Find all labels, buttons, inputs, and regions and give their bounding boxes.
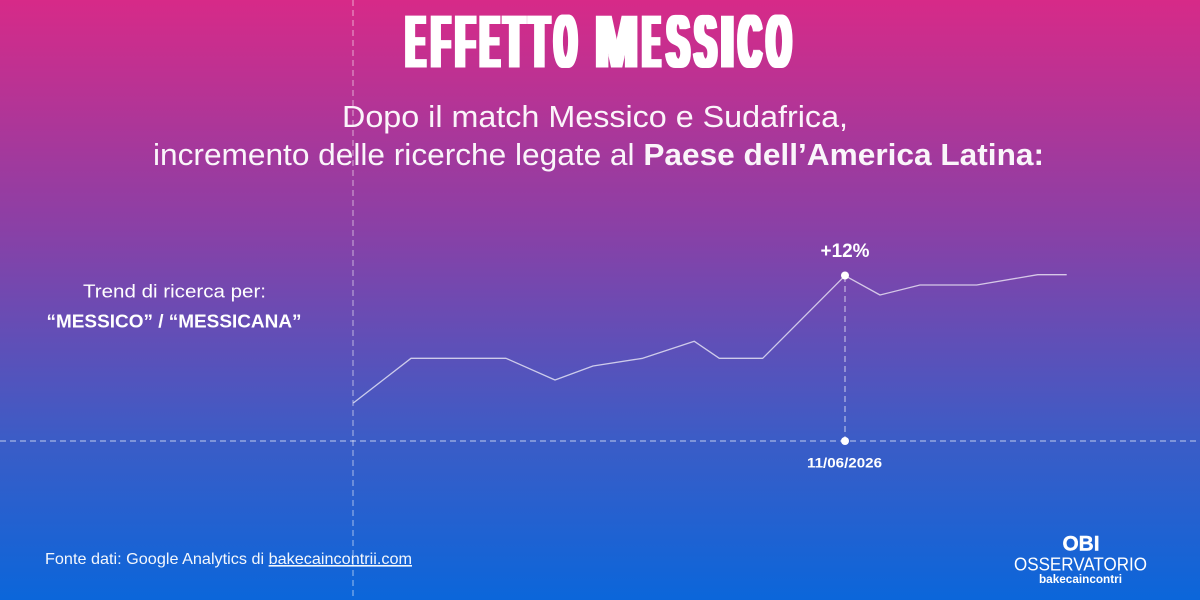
title: S: [695, 0, 716, 84]
title: I: [721, 0, 734, 84]
axis: vertical dashed line: [352, 0, 354, 600]
title: S: [667, 0, 689, 84]
chart label: Trend di ricerca per:: [83, 280, 266, 302]
logo: OBI Osservatorio bakecaincontri: [1014, 532, 1147, 586]
title: O: [555, 0, 576, 84]
subtitle: incremento delle ricerche legate al Paese dell’America Latina:: [153, 137, 1044, 172]
title: C: [739, 0, 761, 84]
subtitle: [153, 99, 1044, 172]
title: F: [432, 0, 450, 84]
text: O: [767, 0, 791, 84]
title: E: [406, 0, 425, 84]
peak point: [841, 272, 849, 280]
title: T: [530, 0, 549, 84]
logo: OBI Osservatorio bakecaincontri: bakecaincontri: [1039, 574, 1122, 586]
date label: 11/06/2026: [807, 455, 882, 471]
date point: [841, 437, 849, 445]
title: M: [596, 0, 638, 84]
title: F: [456, 0, 475, 84]
data source: Fonte dati: Google Analytics di bakecaincontrii.com: [45, 551, 412, 568]
title: T: [504, 0, 524, 84]
date marker: dashed drop line: [844, 276, 846, 441]
chart label: [46, 280, 302, 332]
title: E: [643, 0, 660, 84]
logo: OBI Osservatorio bakecaincontri: OSSERVATORIO: [1014, 554, 1147, 574]
logo: OBI Osservatorio bakecaincontri: OBI: [1062, 532, 1100, 556]
line chart: search trend: [353, 275, 1067, 403]
axis: horizontal dashed line: [0, 440, 1200, 442]
title: E: [480, 0, 499, 84]
subtitle: Dopo il match Messico e Sudafrica,: [342, 99, 848, 134]
peak value: +12%: [820, 240, 870, 262]
chart label: “MESSICO” / “MESSICANA”: [46, 310, 302, 332]
